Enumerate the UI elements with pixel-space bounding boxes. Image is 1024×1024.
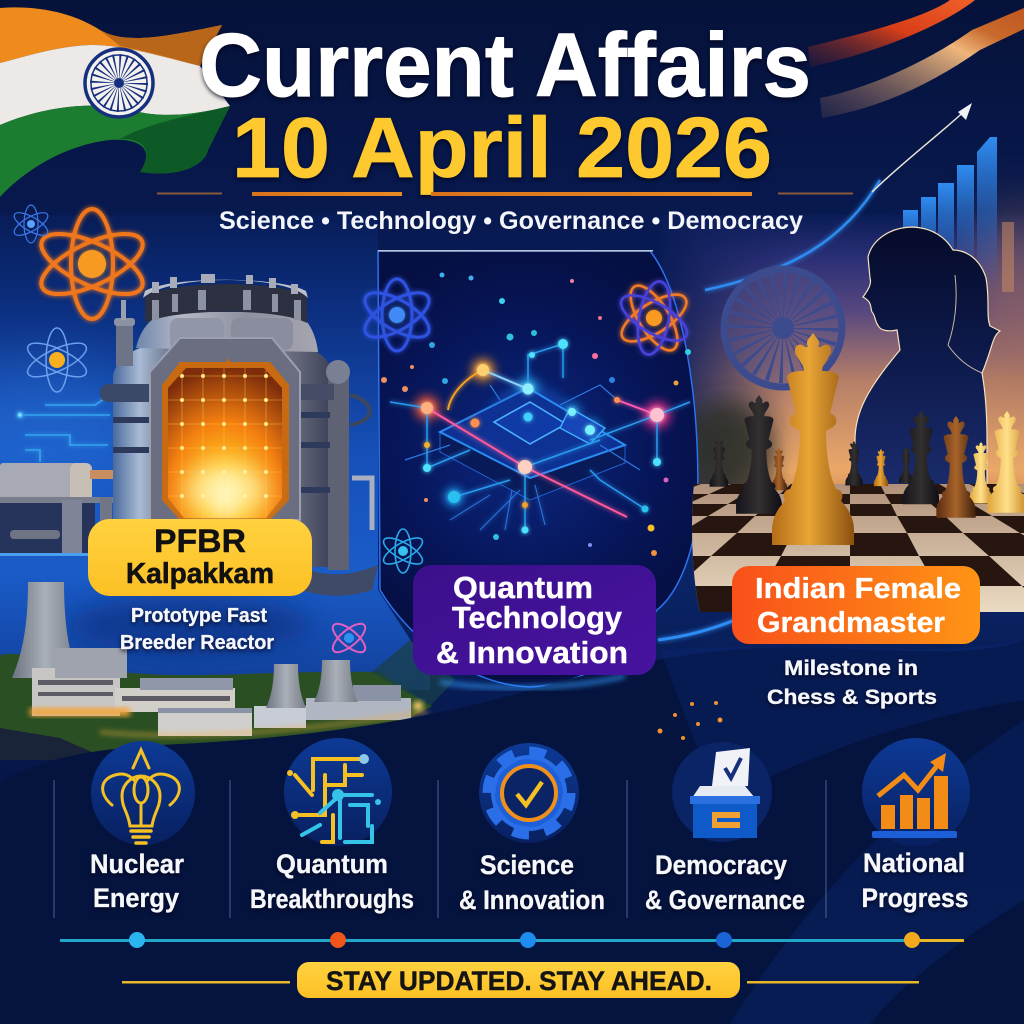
icon: small pink atom [329,619,369,657]
panel: quantum label: Technology [452,600,623,635]
icon: orange-purple atom [614,279,694,357]
reactor stacks and pipes [100,300,378,596]
text: PFBR description: Breeder Reactor [120,632,274,654]
icon: blue atom [358,279,436,351]
icon: nuclear energy bulb [91,741,195,845]
text: nuclear energy: Energy [93,883,179,913]
chess board [692,484,1024,612]
text: national progress: National [863,848,965,878]
hair parting line [948,275,982,373]
node halos [415,359,670,506]
flag of India [0,7,230,197]
text: nuclear energy: Nuclear [90,849,184,879]
reactor core frame [150,338,300,520]
icon: ballot box [672,742,772,842]
road [0,728,110,760]
circuit traces left of reactor [18,395,110,462]
panel: right chess backdrop [660,210,1024,515]
icon: orange atom [33,209,151,319]
icon: progress chart [862,738,970,846]
icon: quantum circuit [284,738,392,846]
panel: PFBR label [88,519,312,596]
title: Current Affairs [199,16,811,116]
column dividers [54,780,826,918]
cooling towers right [266,660,358,708]
left pipe building [0,463,150,556]
bottom swoosh highlights [660,640,1024,1024]
text: PFBR description [120,605,274,654]
text: grandmaster description [767,657,937,709]
icon: small atom upper left [11,205,51,243]
callout: stay updated [122,962,919,998]
ribbons: top right [808,0,1024,118]
chart: quantum chip circuit [390,339,690,534]
silhouette: woman with ponytail [855,227,1000,490]
text: PFBR description: Prototype Fast [131,605,267,627]
bottom dark panel [0,640,1024,1024]
chip base [405,385,640,500]
cooling tower left [12,582,78,678]
icon: small yellow atom [23,328,91,392]
plant buildings [30,648,411,736]
chess pieces [710,333,1024,545]
panel: reactor scene [0,274,378,596]
text: quantum breakthroughs: Breakthroughs [250,884,414,914]
panel: PFBR label: Kalpakkam [126,558,274,590]
text: national progress [862,848,968,913]
text: grandmaster description: Milestone in [784,657,918,680]
panel: quantum label [413,565,656,675]
panel: left reactor backdrop [0,215,430,690]
text: science and innovation: Science [480,850,574,880]
reactor top ring [143,274,308,350]
scattered particles [381,272,691,556]
text: democracy and governance: Democracy [655,850,787,880]
reactor body [113,345,333,567]
reactor glowing core [162,358,289,520]
text: quantum breakthroughs: Quantum [276,849,388,879]
text: nuclear energy [90,849,184,913]
panel: power plant landscape [0,582,455,760]
subtitle: Science • Technology • Governance • Democracy [219,207,803,235]
text: science and innovation: & Innovation [459,885,605,915]
icon: science gear [479,743,579,843]
orange particles lower centre [658,701,722,740]
panel: grandmaster label [732,566,980,644]
text: quantum breakthroughs [250,849,414,914]
timeline [60,932,964,948]
icon: small cyan atom [380,529,426,573]
panel: grandmaster label: Grandmaster [757,607,945,639]
circuit lines [390,344,690,530]
text: democracy and governance [645,850,805,915]
bar chart backdrop with arrow [705,103,1014,293]
panel: quantum label: & Innovation [436,635,628,670]
icon: flag chakra [85,49,153,117]
callout: stay updated: STAY UPDATED. STAY AHEAD. [326,966,712,996]
glow lines beside quantum label [440,620,735,687]
panel: centre quantum backdrop [378,250,698,687]
text: democracy and governance: & Governance [645,885,805,915]
panel: PFBR label: PFBR [154,523,246,559]
text: grandmaster description: Chess & Sports [767,686,937,709]
icon: faded Ashoka chakra [724,269,842,387]
heading divider [157,192,853,196]
text: national progress: Progress [862,883,968,913]
text: science and innovation [459,850,605,915]
reactor upper dome [136,312,318,352]
panel: quantum label: Quantum [453,570,593,605]
date heading: 10 April 2026 [232,101,772,196]
panel: grandmaster label: Indian Female [755,573,961,605]
circuit nodes [421,339,664,534]
